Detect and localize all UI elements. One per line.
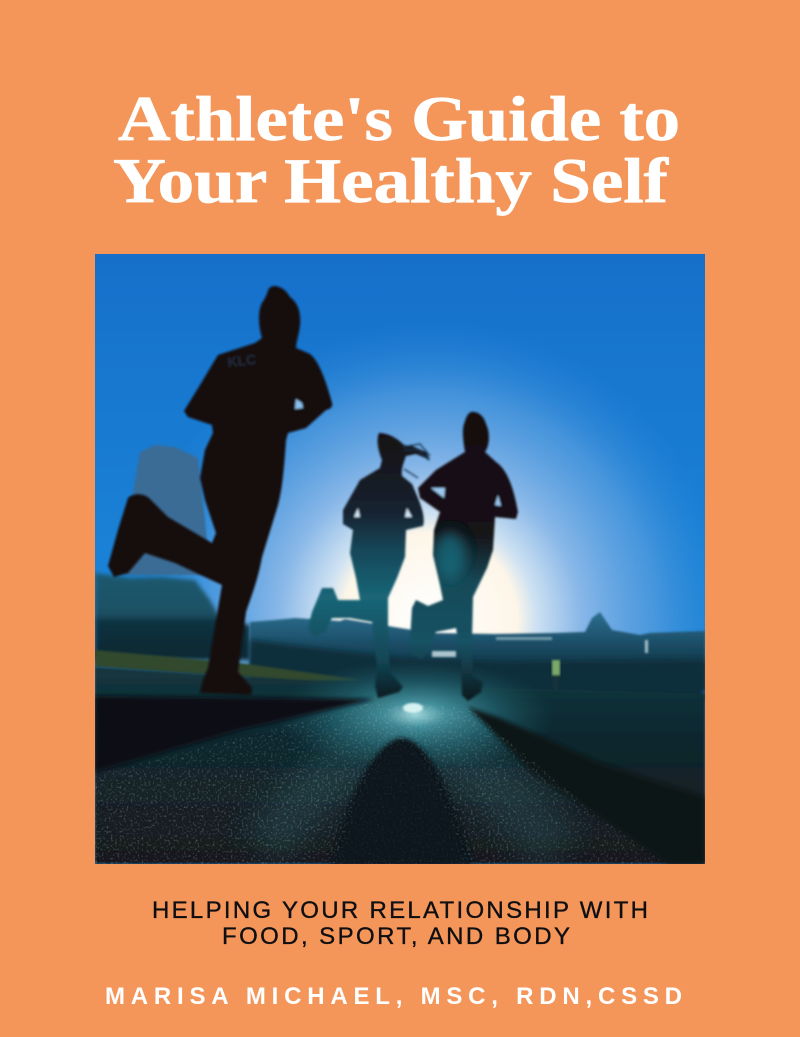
dark fence line [250, 640, 705, 700]
road highlight [403, 703, 423, 713]
shirt lettering: KLC [227, 351, 257, 370]
central foreground shadow [330, 738, 475, 864]
right runner shadow [468, 707, 705, 864]
city building [125, 445, 210, 575]
lit streak on the right [430, 730, 560, 850]
author: MARISA MICHAEL, MSC, RDN,CSSD [105, 983, 682, 1010]
subtitle: HELPING YOUR RELATIONSHIP WITH [152, 897, 648, 924]
distant trees left [95, 573, 250, 660]
title [113, 84, 680, 216]
subtitle: FOOD, SPORT, AND BODY [222, 923, 570, 950]
arm gaps [431, 488, 501, 506]
lit streak on the left [262, 715, 400, 845]
left runner shadow [95, 696, 375, 772]
road [95, 667, 705, 864]
hip glow [434, 532, 466, 580]
title: Athlete's Guide to [118, 84, 680, 154]
elbow gap [295, 399, 303, 409]
asphalt grain, lit area [95, 700, 667, 864]
hair strands [403, 444, 430, 478]
cover page [95, 96, 705, 1008]
small background figure [552, 660, 560, 690]
subtitle [152, 897, 648, 950]
runner 3 [410, 412, 518, 701]
sun glow [170, 346, 702, 665]
skyline and stadium [250, 612, 705, 690]
road sheen [290, 666, 540, 764]
grass strip [95, 650, 362, 682]
photo: three runners at sunrise [95, 254, 705, 864]
runner 2 [308, 433, 430, 698]
arm gaps [354, 508, 412, 517]
bright gaps in the skyline [432, 637, 648, 657]
runner 1 [108, 286, 332, 695]
title: Your Healthy Self [113, 146, 669, 216]
central shadow over grain [338, 745, 466, 864]
sky [95, 254, 705, 864]
asphalt grain, foreground [95, 770, 515, 864]
